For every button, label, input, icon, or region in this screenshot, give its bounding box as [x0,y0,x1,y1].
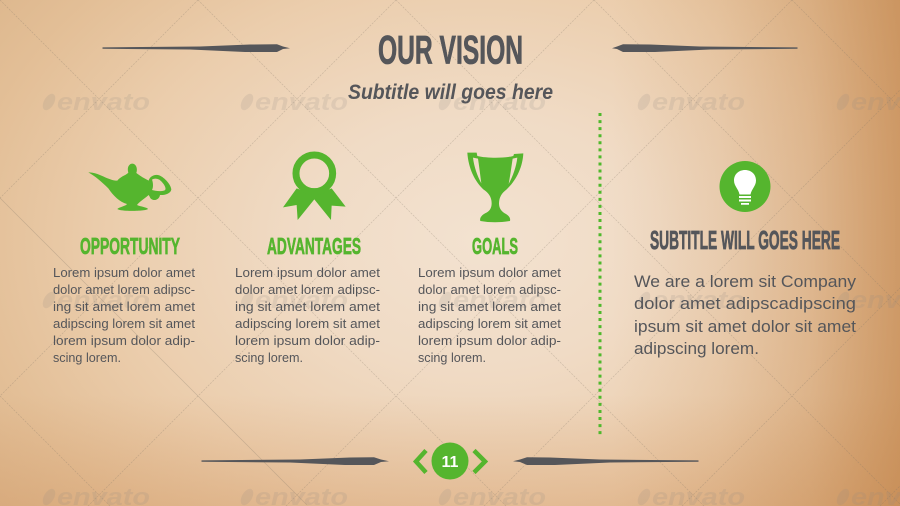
arrow: next [474,450,485,472]
text block: goals: ing sit amet lorem amet [418,299,561,314]
heading: opportunity: OPPORTUNITY [80,233,180,259]
text block: goals: Lorem ipsum dolor amet [418,265,561,280]
text block: right: ipsum sit amet dolor sit amet [634,317,856,336]
text block: opportunity: dolor amet lorem adipsc- [53,282,195,297]
text block: opportunity: lorem ipsum dolor adip- [53,333,195,348]
heading: goals: GOALS [472,233,518,259]
text block: advantages: dolor amet lorem adipsc- [235,282,380,297]
text block: advantages: ing sit amet lorem amet [235,299,380,314]
icon: light bulb [720,161,770,212]
text block: goals: scing lorem. [418,350,486,365]
text: envato [255,287,348,314]
text: envato [453,287,546,314]
text block: opportunity: ing sit amet lorem amet [53,299,195,314]
text block: right: adipscing lorem. [634,339,759,358]
text: envato [652,287,745,314]
text block: opportunity: scing lorem. [53,350,121,365]
page number [432,442,468,480]
icon: genie lamp [88,164,171,211]
ornament: bottom left [201,457,389,465]
text block: goals: dolor amet lorem adipsc- [418,282,561,297]
page number: 11 [442,454,459,471]
text block: opportunity: adipscing lorem sit amet [53,316,195,331]
text block: right: dolor amet adipscadipscing [634,294,856,313]
text block: advantages [235,265,380,365]
ornament: bottom right [513,457,699,465]
arrow: previous [416,450,426,472]
subtitle: Subtitle will goes here [348,81,553,104]
text: envato [255,89,348,116]
ornament: top right [612,44,798,52]
text block: goals [418,265,561,365]
text: envato [453,89,546,116]
text block: goals: adipscing lorem sit amet [418,316,561,331]
heading: advantages: ADVANTAGES [267,233,361,259]
text block: advantages: lorem ipsum dolor adip- [235,333,380,348]
text: envato [652,89,745,116]
dotted divider [598,113,602,436]
title: OUR VISION [378,28,523,72]
icon: trophy [467,153,523,222]
text block: advantages: Lorem ipsum dolor amet [235,265,380,280]
text block: opportunity [53,265,195,365]
text: envato [57,89,150,116]
text block: right [634,272,857,358]
icon: award ribbon [283,155,346,220]
text block: right: We are a lorem sit Company [634,272,857,291]
text block: goals: lorem ipsum dolor adip- [418,333,561,348]
text: envato [57,287,150,314]
text block: opportunity: Lorem ipsum dolor amet [53,265,195,280]
ornament: top left [102,44,290,52]
text block: advantages: scing lorem. [235,350,303,365]
text block: advantages: adipscing lorem sit amet [235,316,380,331]
